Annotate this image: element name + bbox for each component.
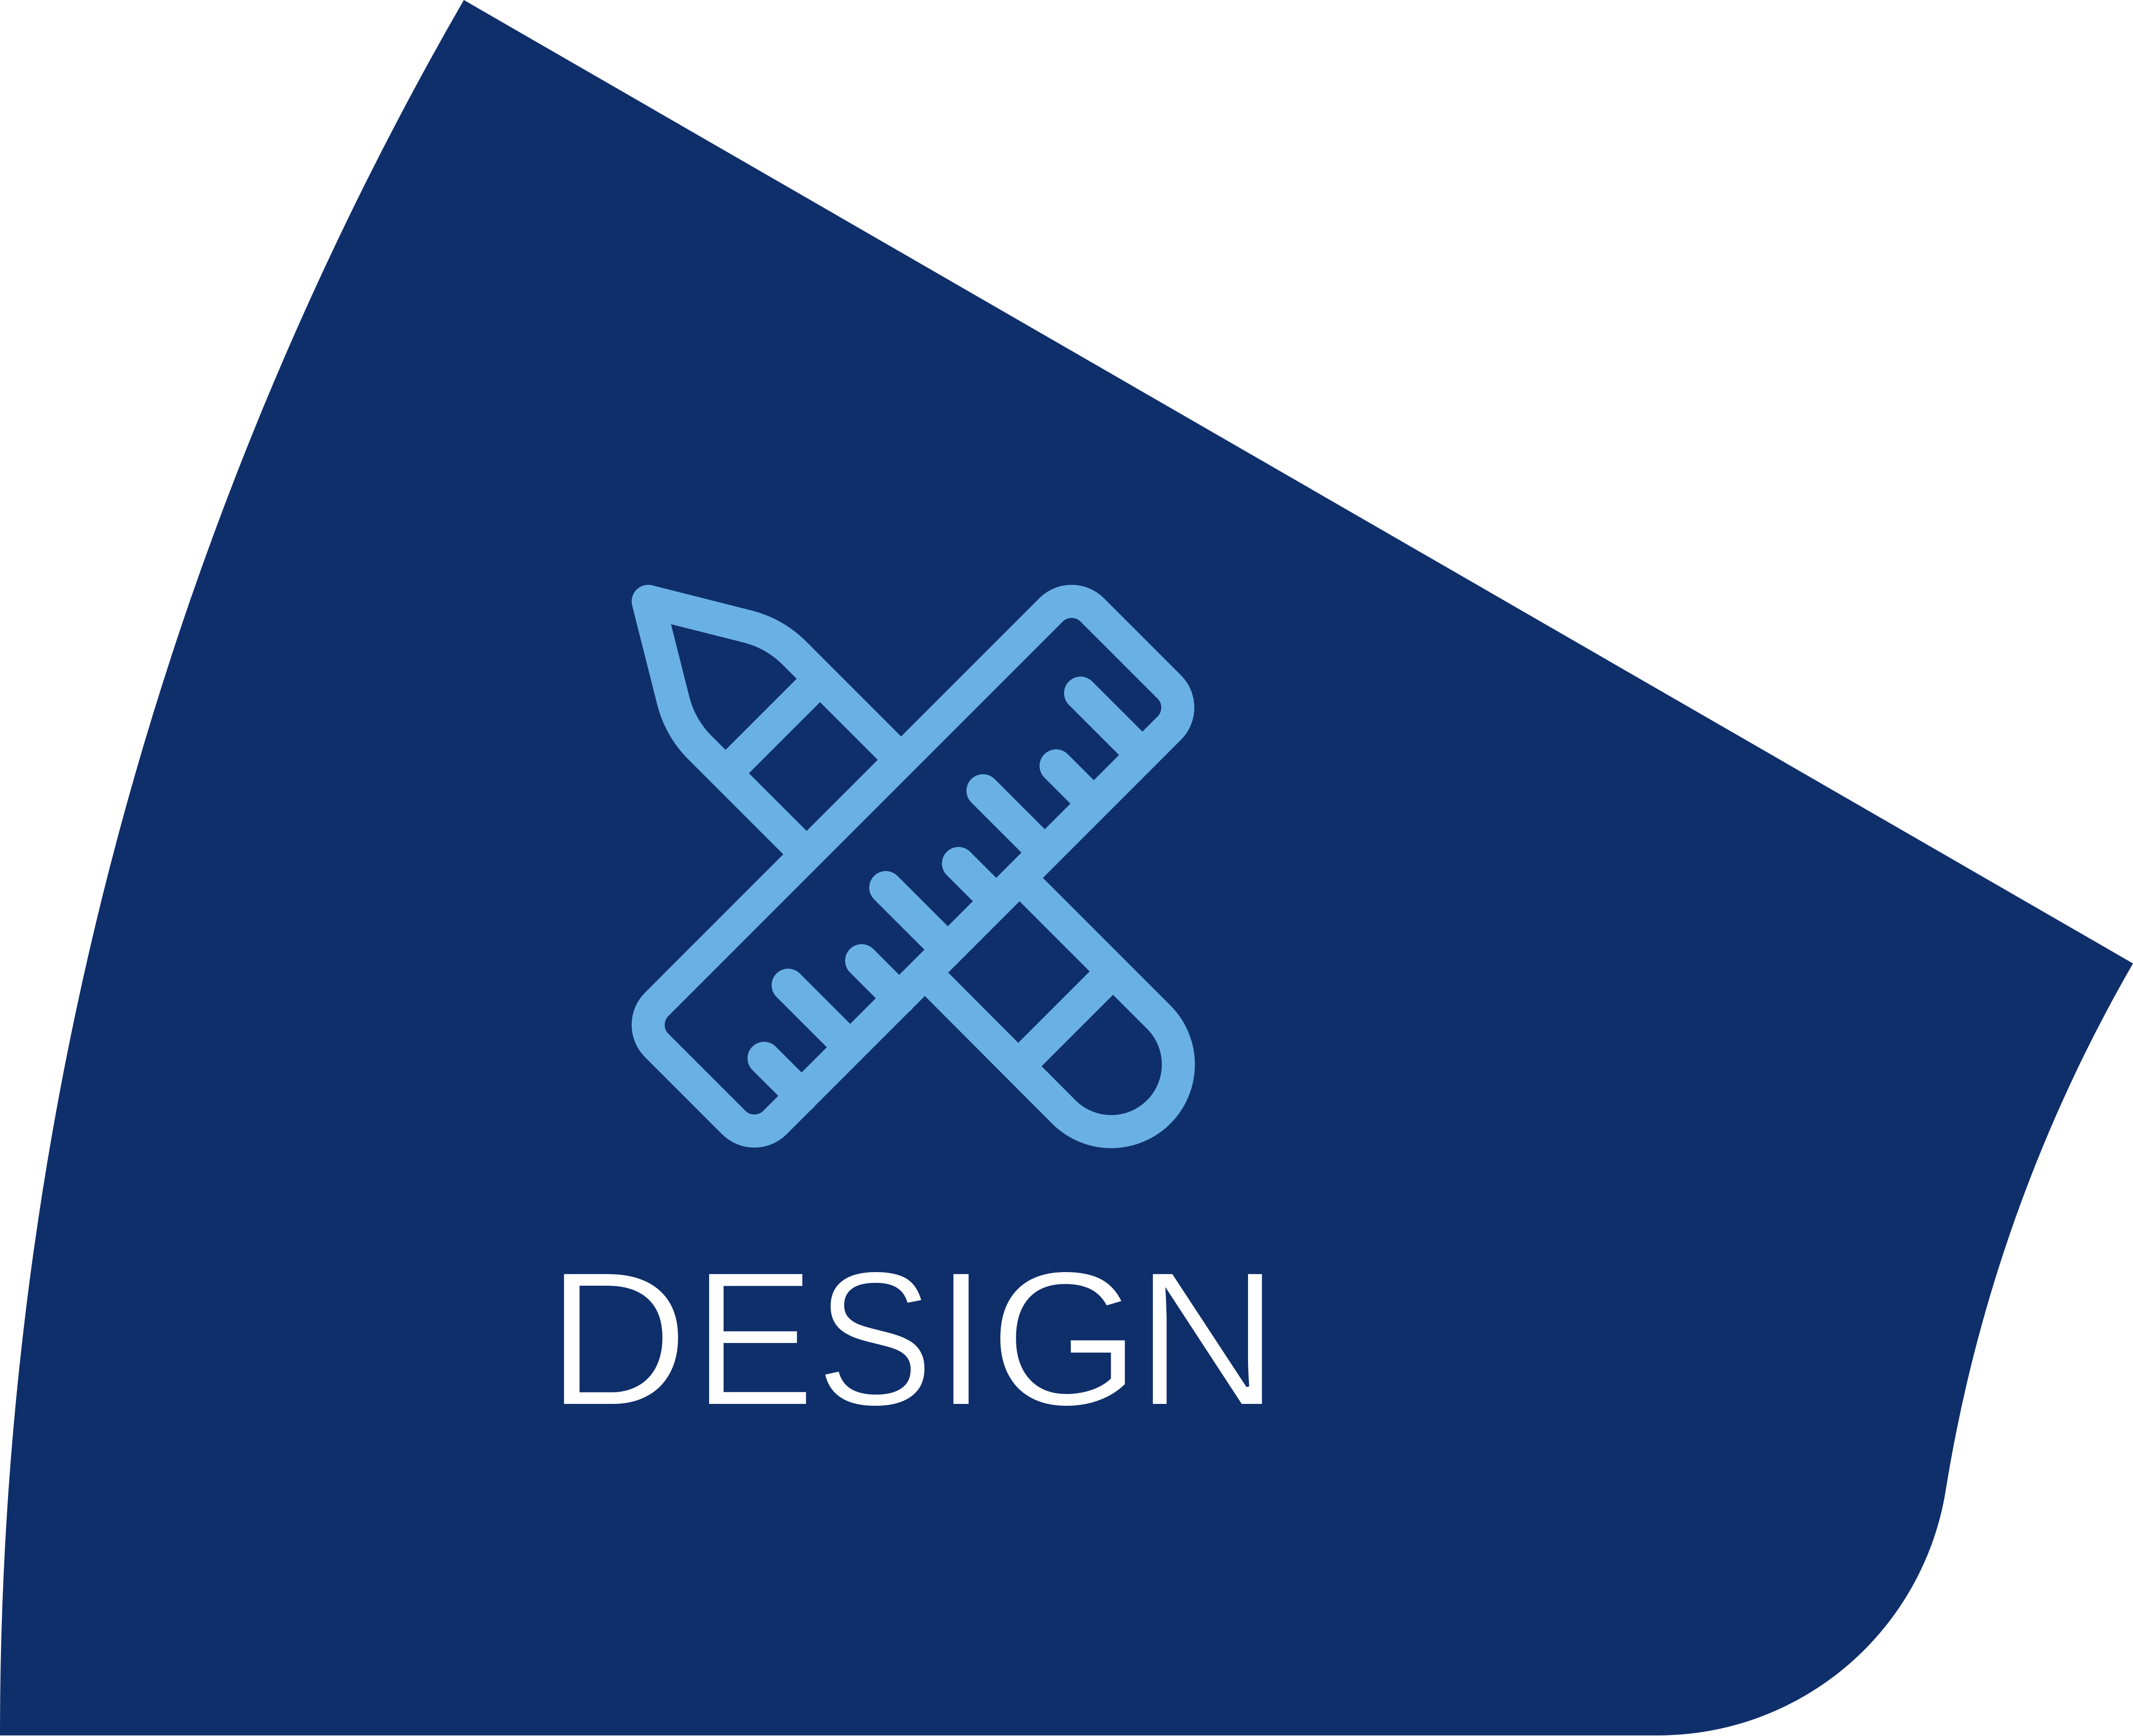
ruler outline	[636, 589, 1190, 1143]
heading: DESIGN: S	[816, 1231, 934, 1447]
pencil lower band	[1018, 971, 1113, 1066]
pencil tip and upper body	[648, 601, 901, 854]
ruler ticks	[764, 693, 1142, 1096]
heading: DESIGN: N	[1135, 1231, 1280, 1447]
heading: DESIGN	[564, 1274, 1262, 1405]
pencil lower body and eraser	[925, 878, 1178, 1131]
heading: DESIGN: E	[693, 1231, 815, 1447]
pencil upper band	[726, 679, 820, 773]
heading: DESIGN: G	[989, 1231, 1141, 1447]
heading: DESIGN: D	[546, 1231, 689, 1447]
heading: DESIGN: I	[934, 1231, 988, 1447]
icon: crossed pencil and ruler	[636, 589, 1190, 1143]
